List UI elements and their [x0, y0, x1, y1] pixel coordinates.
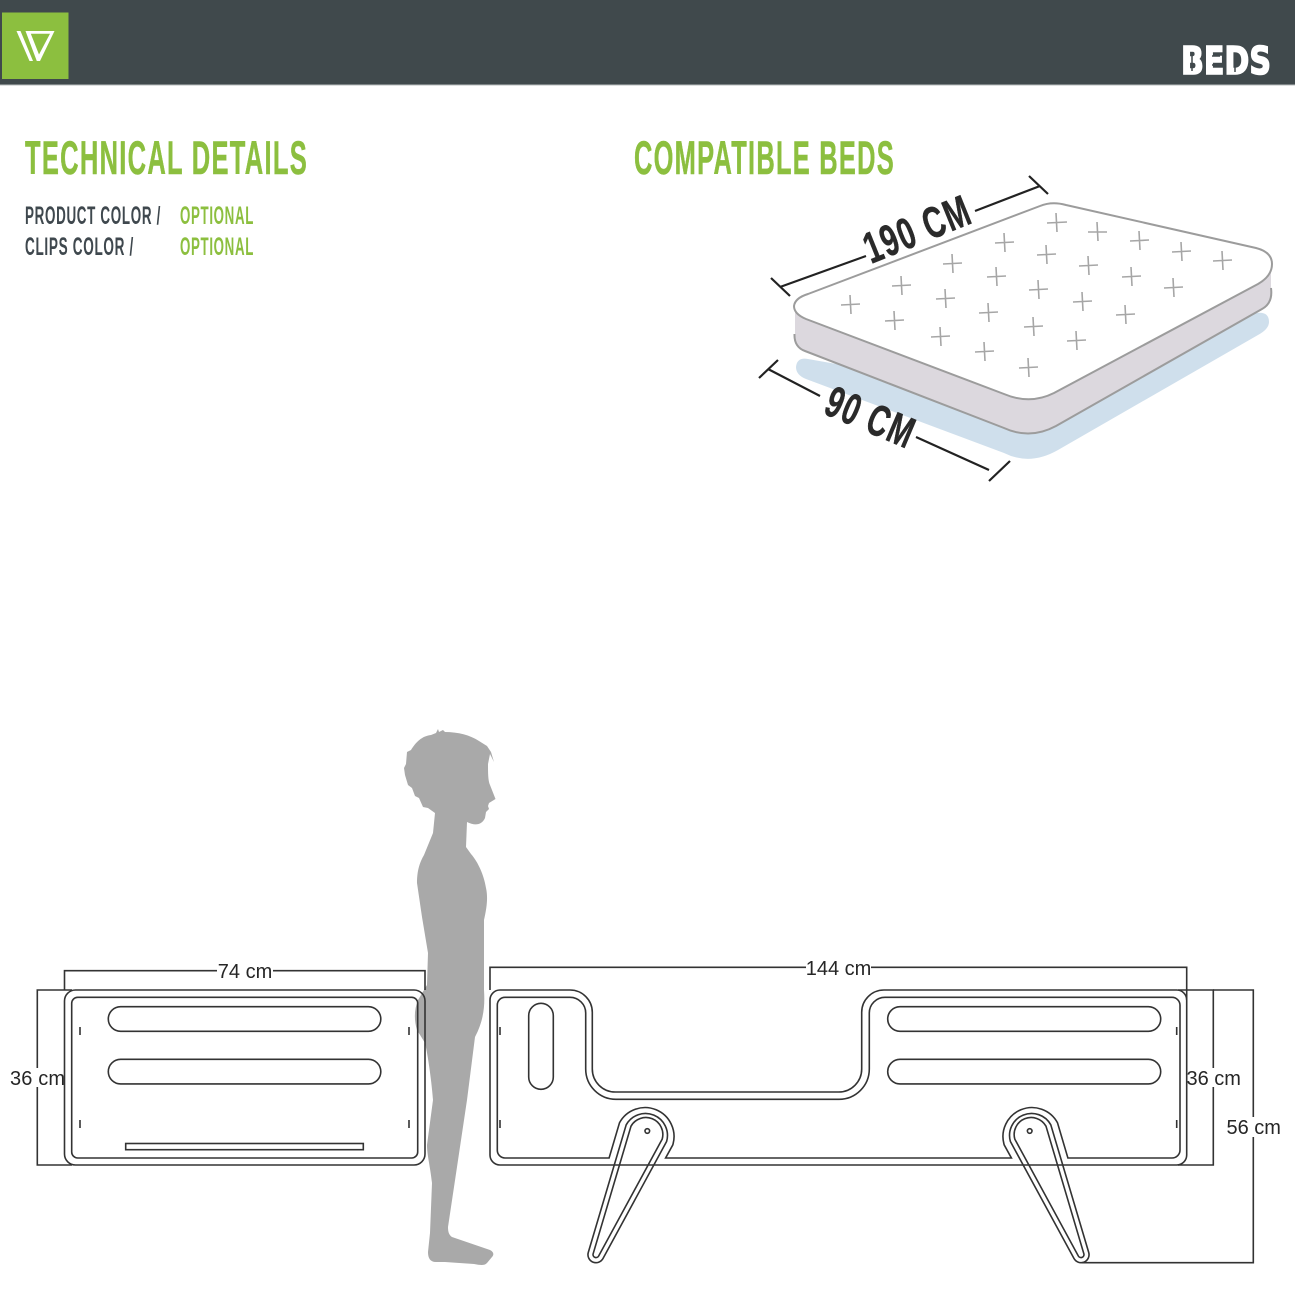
dimension: 144 cm — [490, 958, 1187, 1000]
dimension: 56 cm — [1082, 990, 1281, 1263]
dimension: 190 cm — [771, 176, 1048, 296]
heading: compatible beds: COMPATIBLE BEDS — [634, 131, 895, 184]
board bar — [126, 1144, 363, 1150]
dimension: left 36 cm: 36 cm — [10, 1068, 65, 1090]
dimension: 90 cm — [759, 360, 1010, 481]
left leg — [588, 1113, 667, 1263]
text block: product and clips color: OPTIONAL — [180, 233, 254, 261]
board ticks — [80, 1027, 409, 1128]
header bar — [0, 0, 1295, 86]
dimension: 190 cm: 190 CM — [856, 186, 979, 273]
dimension: left 36 cm — [10, 990, 72, 1165]
header label: beds: BEDS — [1181, 39, 1271, 83]
drawing: headboard — [490, 990, 1187, 1263]
mattress illustration — [794, 203, 1272, 459]
dimension: 144 cm: 144 cm — [806, 958, 871, 980]
board slots — [108, 1007, 381, 1084]
icon: person silhouette — [404, 729, 496, 1265]
icon: logo — [2, 12, 68, 79]
text block: product and clips color: PRODUCT COLOR / — [25, 202, 161, 230]
drawing: side board — [64, 990, 425, 1165]
headboard slots — [529, 1003, 1161, 1089]
mattress tufting crosses — [841, 213, 1232, 377]
heading: technical details: TECHNICAL DETAILS — [25, 131, 308, 184]
dimension: 74 cm: 74 cm — [218, 961, 272, 983]
dimension: 56 cm: 56 cm — [1226, 1117, 1281, 1139]
dimension: right 36 cm: 36 cm — [1186, 1068, 1241, 1090]
mattress shadow — [796, 313, 1269, 459]
mattress side — [794, 262, 1271, 434]
headboard ticks — [500, 1027, 1177, 1128]
mattress top — [794, 203, 1272, 399]
right leg — [1010, 1113, 1089, 1263]
dimension: 74 cm — [64, 961, 425, 990]
dimension: right 36 cm — [1178, 990, 1241, 1165]
text block: product and clips color: CLIPS COLOR / — [25, 233, 134, 261]
text block: product and clips color: OPTIONAL — [180, 202, 254, 230]
dimension: 90 cm: 90 CM — [818, 377, 923, 459]
text block: product and clips color — [25, 202, 254, 261]
